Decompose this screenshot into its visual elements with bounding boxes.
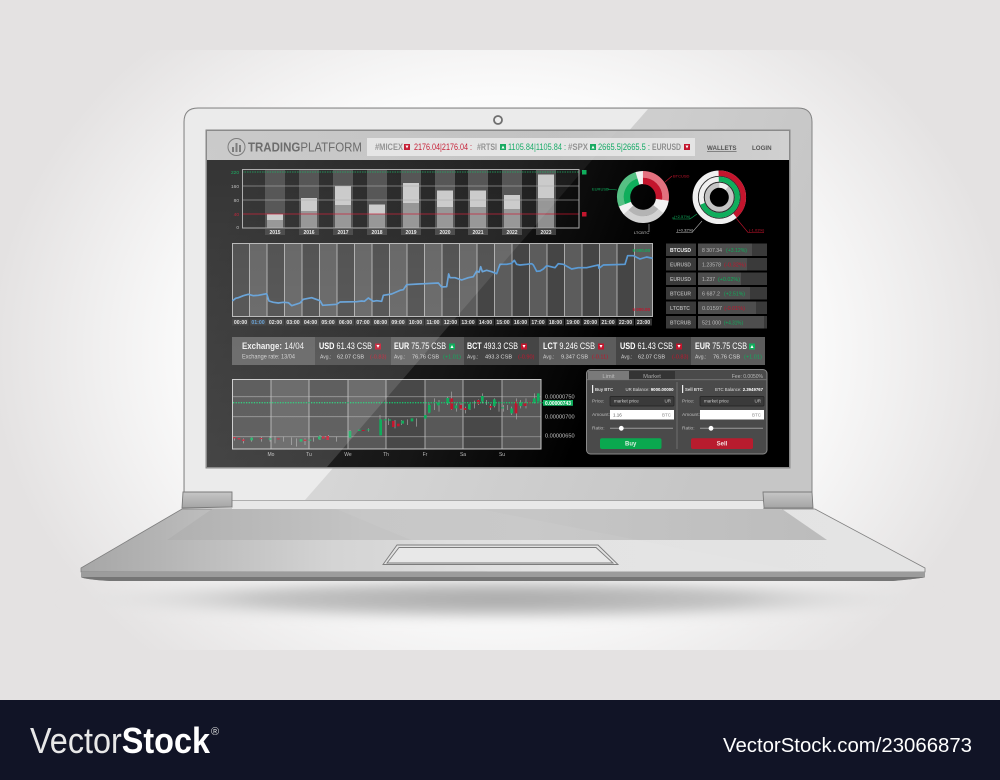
buy form: Buy BTC bbox=[595, 387, 613, 392]
image id: VectorStock.com/23066873 bbox=[723, 735, 972, 757]
hour labels: 09:00 bbox=[391, 320, 405, 326]
BCT cell: Avg.: bbox=[467, 354, 478, 360]
EUR cell: (+1.01) bbox=[443, 354, 461, 360]
day labels: Fr bbox=[423, 452, 428, 458]
row BTCUSD: (+3.12%) bbox=[726, 248, 747, 254]
year labels: 2017 bbox=[337, 230, 349, 236]
year labels: 2022 bbox=[506, 230, 518, 236]
hour labels: 19:00 bbox=[566, 320, 580, 326]
BCT cell: 493.3 CSB bbox=[485, 354, 512, 360]
USD cell second: 62.07 CSB bbox=[638, 354, 665, 360]
hour labels: 11:00 bbox=[427, 320, 440, 326]
y axis labels: 220 bbox=[231, 170, 239, 176]
donut left labels: LTCBTC bbox=[634, 230, 649, 235]
screen glass reflection bbox=[207, 131, 617, 467]
high and low markers: 9 000.00 bbox=[632, 248, 650, 253]
alternate columns bbox=[250, 243, 652, 316]
registered mark: ® bbox=[211, 726, 219, 738]
USD cell: 62.07 CSB bbox=[337, 354, 364, 360]
EUR cell second bbox=[695, 341, 762, 360]
BCT cell: (-0.90) bbox=[518, 354, 535, 360]
gridlines bbox=[242, 186, 579, 200]
row LTCBTC: (-0.01%) bbox=[724, 306, 745, 312]
sell form: UR bbox=[754, 399, 762, 404]
row LTCBTC bbox=[666, 302, 767, 314]
line chart columns bbox=[232, 243, 634, 316]
USD cell: Avg.: bbox=[320, 354, 331, 360]
hour labels: 08:00 bbox=[374, 320, 387, 326]
hour labels: 13:00 bbox=[461, 320, 475, 326]
webcam bbox=[494, 116, 502, 124]
USD cell second: Avg.: bbox=[621, 354, 632, 360]
hour labels bbox=[232, 318, 652, 326]
sell form: BTC bbox=[752, 412, 762, 418]
hour labels: 14:00 bbox=[479, 320, 492, 326]
row BTCEUR bbox=[666, 287, 767, 300]
ticker: 2665.5|2665.5 : bbox=[598, 142, 650, 152]
hour labels: 20:00 bbox=[584, 320, 597, 326]
hour labels: 10:00 bbox=[409, 320, 422, 326]
EUR cell: 76.76 CSB bbox=[412, 354, 439, 360]
donut right labels: (+0.32%) bbox=[677, 228, 694, 232]
LCT cell bbox=[543, 341, 608, 360]
sell form: Ratio: bbox=[682, 426, 695, 432]
right hinge bbox=[763, 492, 813, 508]
threshold markers bbox=[582, 170, 586, 174]
laptop base bbox=[81, 509, 925, 581]
trackpad bbox=[383, 545, 618, 564]
row EURUSD: EURUSD bbox=[670, 262, 691, 268]
buy form: Amount: bbox=[592, 412, 610, 418]
BCT cell bbox=[467, 341, 535, 360]
hour labels: 21:00 bbox=[601, 320, 615, 326]
LCT cell: Avg.: bbox=[543, 354, 554, 360]
hour labels: 16:00 bbox=[514, 320, 527, 326]
price axis bbox=[543, 394, 575, 440]
price line bbox=[232, 256, 653, 306]
sell form: Amount: bbox=[682, 412, 700, 418]
year labels: 2020 bbox=[439, 230, 451, 236]
row BTCEUR: (+2.51%) bbox=[724, 292, 745, 298]
EUR cell second: EUR 75.75 CSB bbox=[695, 341, 747, 351]
year labels: 2019 bbox=[405, 230, 417, 236]
donut right labels: (-1.03%) bbox=[749, 228, 765, 232]
y axis labels: 80 bbox=[234, 198, 239, 204]
exchange date: Exchange rate: 13/04 bbox=[242, 354, 296, 360]
nav: wallets: WALLETS bbox=[707, 145, 737, 152]
buy form: Ratio: bbox=[592, 426, 605, 432]
row EURUSD second bbox=[666, 272, 767, 285]
price axis: 0.00000743 bbox=[545, 401, 571, 407]
LCT cell: (-0.11) bbox=[592, 354, 608, 360]
buy form bbox=[592, 385, 674, 449]
EUR cell second: Avg.: bbox=[695, 354, 706, 360]
keyboard area bbox=[167, 509, 827, 540]
buy form: UR Balance: 9000.00000 bbox=[625, 387, 674, 392]
tabs: Market bbox=[643, 374, 661, 380]
row BTCUSD: BTCUSD bbox=[670, 248, 691, 254]
ticker: #RTSI bbox=[477, 142, 497, 152]
row EURUSD second: (+0.02%) bbox=[718, 277, 740, 283]
hour labels: 22:00 bbox=[619, 320, 632, 326]
threshold lines bbox=[242, 171, 579, 173]
hour labels: 17:00 bbox=[531, 320, 545, 326]
bar columns bbox=[265, 169, 556, 228]
candle gridlines bbox=[232, 397, 541, 437]
year labels: 2016 bbox=[303, 230, 315, 236]
year labels: 2023 bbox=[540, 230, 552, 236]
laptop lid bbox=[184, 108, 812, 509]
exchange strip bbox=[232, 337, 765, 365]
EUR cell: EUR 75.75 CSB bbox=[394, 341, 446, 351]
buy button bbox=[600, 438, 662, 449]
ticker: 1105.84|1105.84 : bbox=[508, 142, 566, 152]
ticker: #MICEX bbox=[375, 142, 403, 152]
y axis labels: 160 bbox=[231, 184, 239, 190]
buy form: BTC bbox=[662, 412, 672, 418]
candlestick chart bbox=[232, 379, 575, 458]
day labels: Th bbox=[383, 452, 389, 458]
sell form: BTC Balance: 2.3949767 bbox=[715, 387, 764, 392]
buy form: UR bbox=[664, 399, 672, 404]
bar chart bbox=[231, 169, 586, 236]
order panel bbox=[586, 370, 767, 454]
exchange date: Exchange: 14/04 bbox=[242, 341, 304, 351]
day labels: Su bbox=[499, 452, 505, 458]
year labels: 2015 bbox=[269, 230, 281, 236]
hour labels: 04:00 bbox=[304, 320, 317, 326]
USD cell: USD 61.43 CSB bbox=[319, 341, 372, 351]
EUR cell bbox=[394, 341, 461, 360]
day labels: Mo bbox=[268, 452, 275, 458]
chart frame bbox=[242, 170, 579, 228]
ticker: EURUSD bbox=[652, 142, 681, 152]
row EURUSD second: EURUSD bbox=[670, 277, 691, 283]
USD cell second bbox=[620, 341, 689, 360]
donut chart right bbox=[673, 173, 765, 232]
exchange date bbox=[242, 341, 304, 360]
row EURUSD second: 1.237 bbox=[702, 277, 715, 283]
row BTCRUB: (+4.31%) bbox=[724, 320, 743, 326]
candle columns bbox=[232, 379, 502, 449]
laptop shadow bbox=[55, 575, 945, 623]
price axis: 0.00000700 bbox=[545, 414, 575, 420]
price axis: 0.00000650 bbox=[545, 434, 575, 440]
hour labels: 02:00 bbox=[269, 320, 282, 326]
ticker: #SPX bbox=[568, 142, 588, 152]
LCT cell: 9.347 CSB bbox=[561, 354, 588, 360]
hinge strip bbox=[232, 501, 763, 509]
left hinge bbox=[182, 492, 232, 508]
buy form: Price: bbox=[592, 398, 604, 404]
y axis labels: 40 bbox=[234, 212, 239, 218]
divider bbox=[676, 382, 678, 449]
day labels: Tu bbox=[306, 452, 312, 458]
donut left labels: BTCUSD bbox=[673, 174, 690, 178]
buy form: 1.16 bbox=[613, 412, 622, 418]
header bar bbox=[207, 131, 789, 160]
year labels: 2021 bbox=[472, 230, 484, 236]
row EURUSD: (-0.32%) bbox=[724, 262, 746, 268]
row BTCEUR: 6 687.2 bbox=[702, 292, 720, 298]
nav: login: LOGIN bbox=[752, 145, 772, 152]
EUR cell second: 76.76 CSB bbox=[713, 354, 740, 360]
EUR cell second: (+1.01) bbox=[744, 354, 762, 360]
sell button bbox=[691, 438, 753, 449]
logo text: TRADINGPLATFORM bbox=[248, 140, 362, 154]
donut left labels bbox=[592, 174, 690, 235]
USD cell second: (-0.83) bbox=[672, 354, 689, 360]
USD cell second: USD 61.43 CSB bbox=[620, 341, 673, 351]
tabs: Limit bbox=[602, 374, 615, 380]
price axis: 0.00000750 bbox=[545, 394, 575, 400]
buy form: market price bbox=[614, 399, 639, 404]
sell form: Price: bbox=[682, 398, 694, 404]
USD cell bbox=[319, 341, 387, 360]
day labels bbox=[268, 452, 505, 458]
tabs bbox=[587, 371, 767, 380]
row LTCBTC: 0.01597 bbox=[702, 306, 722, 312]
hour labels: 15:00 bbox=[496, 320, 510, 326]
logo icon bbox=[228, 138, 245, 156]
sell form: market price bbox=[704, 399, 729, 404]
candles bbox=[234, 392, 538, 447]
year labels: 2018 bbox=[371, 230, 383, 236]
lower bar segments bbox=[267, 198, 554, 228]
ticker bbox=[367, 138, 695, 156]
hour labels: 06:00 bbox=[339, 320, 352, 326]
ticker: 2176.04|2176.04 : bbox=[414, 142, 472, 152]
row BTCRUB: 521 000 bbox=[702, 320, 721, 326]
year labels bbox=[265, 229, 556, 236]
column dividers bbox=[250, 243, 634, 317]
y axis labels: 0 bbox=[236, 225, 239, 231]
line chart: 5 000.00 bbox=[632, 307, 650, 312]
EUR cell: Avg.: bbox=[394, 354, 405, 360]
donut right labels: (+2.57%) bbox=[674, 214, 691, 219]
row BTCEUR: BTCEUR bbox=[670, 292, 691, 298]
currency pair table bbox=[666, 244, 767, 328]
hour labels: 23:00 bbox=[637, 320, 650, 326]
sell form bbox=[682, 385, 764, 449]
price level dotted line bbox=[233, 402, 544, 404]
day labels: We bbox=[344, 452, 352, 458]
row EURUSD: 1.23578 bbox=[702, 262, 721, 268]
sell form: Sell bbox=[717, 442, 728, 448]
row BTCUSD: 8 307.34 bbox=[702, 248, 722, 254]
donut chart left bbox=[592, 165, 690, 235]
hour labels: 01:00 bbox=[251, 320, 265, 326]
buy form: Buy bbox=[625, 442, 637, 448]
base reflection bbox=[336, 509, 800, 572]
footer bar bbox=[0, 700, 1000, 780]
sell form: Sell BTC bbox=[685, 387, 703, 392]
hour labels: 12:00 bbox=[444, 320, 457, 326]
hour labels: 05:00 bbox=[321, 320, 335, 326]
row LTCBTC: LTCBTC bbox=[670, 306, 690, 312]
row BTCUSD bbox=[666, 244, 767, 256]
screen bezel and background bbox=[206, 130, 790, 468]
row BTCRUB: BTCRUB bbox=[670, 320, 691, 326]
row EURUSD bbox=[666, 258, 767, 270]
base front edge bbox=[81, 572, 925, 581]
donut right labels bbox=[673, 214, 765, 232]
BCT cell: BCT 493.3 CSB bbox=[467, 341, 518, 351]
y axis labels bbox=[231, 170, 239, 231]
donut left labels: EURUSD bbox=[592, 186, 609, 192]
row BTCRUB bbox=[666, 316, 767, 328]
LCT cell: LCT 9.246 CSB bbox=[543, 341, 595, 351]
VectorStock logo: VectorStock bbox=[30, 720, 211, 761]
hour labels: 03:00 bbox=[286, 320, 300, 326]
line chart bbox=[232, 243, 653, 326]
day labels: Sa bbox=[460, 452, 466, 458]
lid highlight bbox=[185, 109, 648, 500]
tabs: Fee: 0.0050% bbox=[732, 374, 764, 380]
hour labels: 18:00 bbox=[549, 320, 562, 326]
upper bar segments bbox=[267, 174, 554, 220]
USD cell: (-0.83) bbox=[370, 354, 387, 360]
hour labels: 07:00 bbox=[356, 320, 370, 326]
hour labels: 00:00 bbox=[234, 320, 247, 326]
